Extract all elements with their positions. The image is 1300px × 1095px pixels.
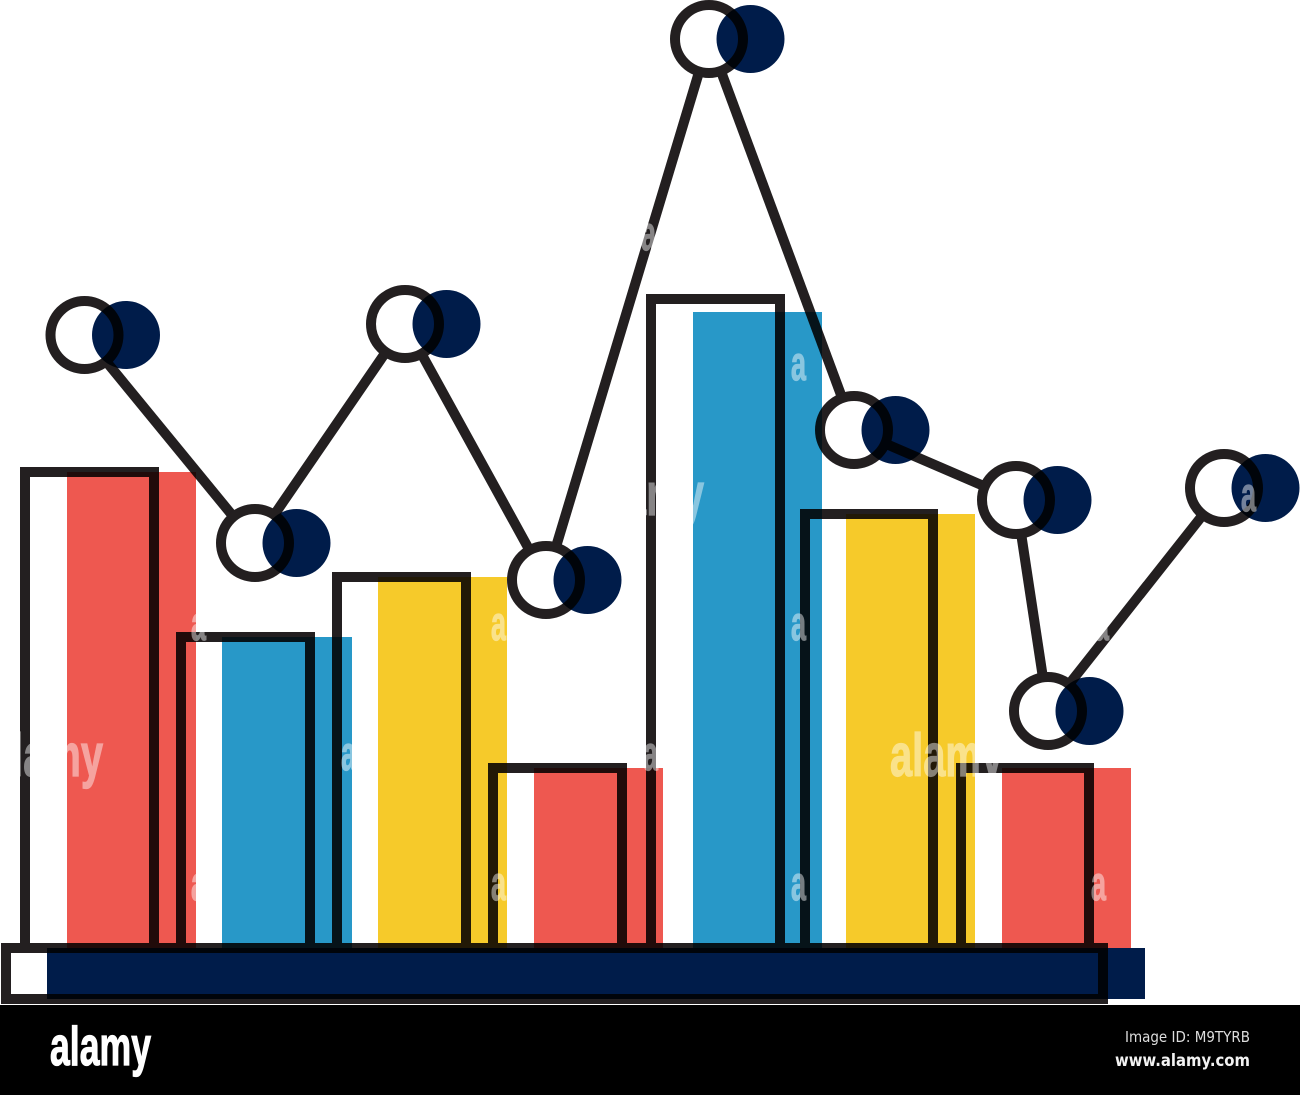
data point rings (50, 5, 1258, 745)
base platform fill (47, 948, 1145, 999)
base platform outline (6, 948, 1103, 999)
stock watermark: a (491, 598, 506, 651)
bar 2 fill: blue (222, 637, 352, 948)
bar 1 fill: red (67, 472, 196, 948)
stock watermark: a (491, 858, 506, 911)
data point colour dots (92, 5, 1300, 745)
bar 6 fill: yellow (846, 514, 975, 948)
stock watermark: a (1091, 858, 1106, 911)
stock watermark: alamy (591, 461, 704, 528)
stock watermark: a (791, 858, 806, 911)
stock watermark: a (791, 338, 806, 391)
stock watermark: a (191, 598, 206, 651)
image id text: Image ID: M9TYRB (1125, 1028, 1250, 1046)
bar 7 fill: red (1002, 768, 1131, 948)
stock watermark: a (1241, 469, 1256, 522)
stock watermark: a (191, 858, 206, 911)
website text: www.alamy.com (1115, 1051, 1250, 1071)
footer band (0, 1005, 1300, 1095)
stock watermark: a (791, 598, 806, 651)
footer logo text: alamy (50, 1015, 151, 1077)
bar 4 fill: red (534, 768, 663, 948)
line graph segments (107, 73, 1202, 683)
stock watermark: a (643, 728, 658, 781)
stock watermark: a (641, 208, 656, 261)
bar 3 fill: yellow (378, 577, 507, 948)
bar 5 fill: blue (693, 312, 822, 948)
offset bar colour fills (67, 312, 1131, 948)
bar outlines (25, 299, 1089, 948)
stock watermark: a (341, 728, 356, 781)
stock watermark: a (1094, 598, 1109, 651)
stock watermark: alamy (890, 722, 1003, 789)
stock watermark (0, 208, 1256, 911)
